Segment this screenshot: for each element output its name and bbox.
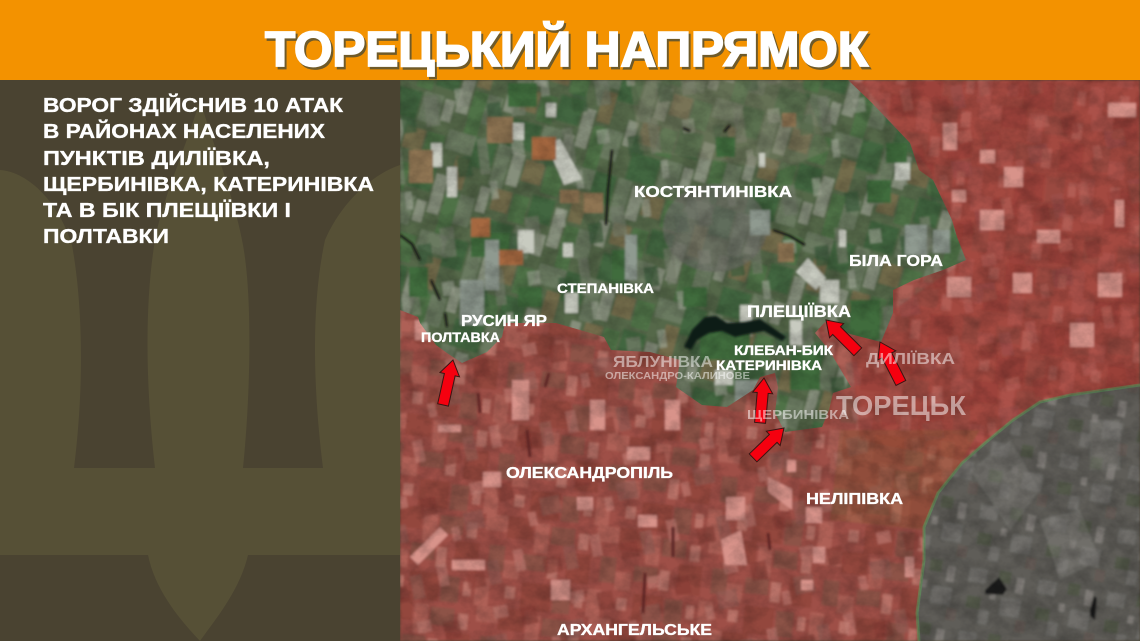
arrow: Dyliivka [871,337,910,388]
arrow: Shcherbynivka [746,421,791,465]
icon: trident watermark [0,100,400,641]
noise: terrain texture [400,80,1140,641]
text block: attack summary: ПОЛТАВКИ [43,226,169,248]
map: satellite base [400,80,1140,641]
label: Nelipivka: НЕЛІПІВКА [806,491,903,508]
map labels: settlements [421,184,967,639]
panel: left text background with trident [0,80,400,641]
label: Pleshchiivka: ПЛЕЩІЇВКА [747,302,851,321]
title shadow: ТОРЕЦЬКИЙ НАПРЯМОК [267,24,870,80]
label: Shcherbynivka: ЩЕРБИНІВКА [747,407,850,422]
label: Kleban-Byk: КЛЕБАН-БИК [734,342,833,358]
label: Bila Hora: БІЛА ГОРА [849,253,943,270]
text block: attack summary: ТА В БІК ПЛЕЩІЇВКИ І [43,199,291,222]
label: Dyliivka: ДИЛІЇВКА [866,350,956,368]
text block: attack summary: ЩЕРБИНІВКА, КАТЕРИНІВКА [43,174,374,196]
text block: attack summary: ПУНКТІВ ДИЛІЇВКА, [43,147,270,170]
front line edge [917,385,1140,641]
region: occupied red territory [400,80,1140,641]
title banner [0,0,1140,80]
label: Stepanivka: СТЕПАНІВКА [557,280,654,296]
label: Toretsk: ТОРЕЦЬК [836,390,967,421]
label: Poltavka: ПОЛТАВКА [421,329,500,345]
arrow: Katerynivka [750,377,774,424]
label: Kostiantynivka: КОСТЯНТИНІВКА [634,184,793,201]
arrows: enemy attack directions [433,313,910,465]
label: Oleksandro-Kalynove: ОЛЕКСАНДРО-КАЛИНОВЕ [605,370,750,382]
title: ТОРЕЦЬКИЙ НАПРЯМОК [265,22,868,77]
region: grey urban territory [900,380,1140,641]
arrow: Poltavka [433,358,463,407]
label: Arkhanhelske: АРХАНГЕЛЬСЬКЕ [557,622,712,639]
text block: attack summary: В РАЙОНАХ НАСЕЛЕНИХ [43,119,326,143]
label: Rusyn Yar: РУСИН ЯР [461,313,547,330]
label: Yablunivka: ЯБЛУНІВКА [613,354,713,371]
region: unoccupied green territory [400,80,1000,440]
arrow: Pleshchiivka [819,313,865,359]
label: Katerynivka: КАТЕРИНІВКА [716,357,822,373]
label: Oleksandropil: ОЛЕКСАНДРОПІЛЬ [506,465,673,482]
text block: attack summary [43,93,374,248]
text block: attack summary: ВОРОГ ЗДІЙСНИВ 10 АТАК [43,93,344,117]
water: reservoir and ravines [400,125,805,613]
